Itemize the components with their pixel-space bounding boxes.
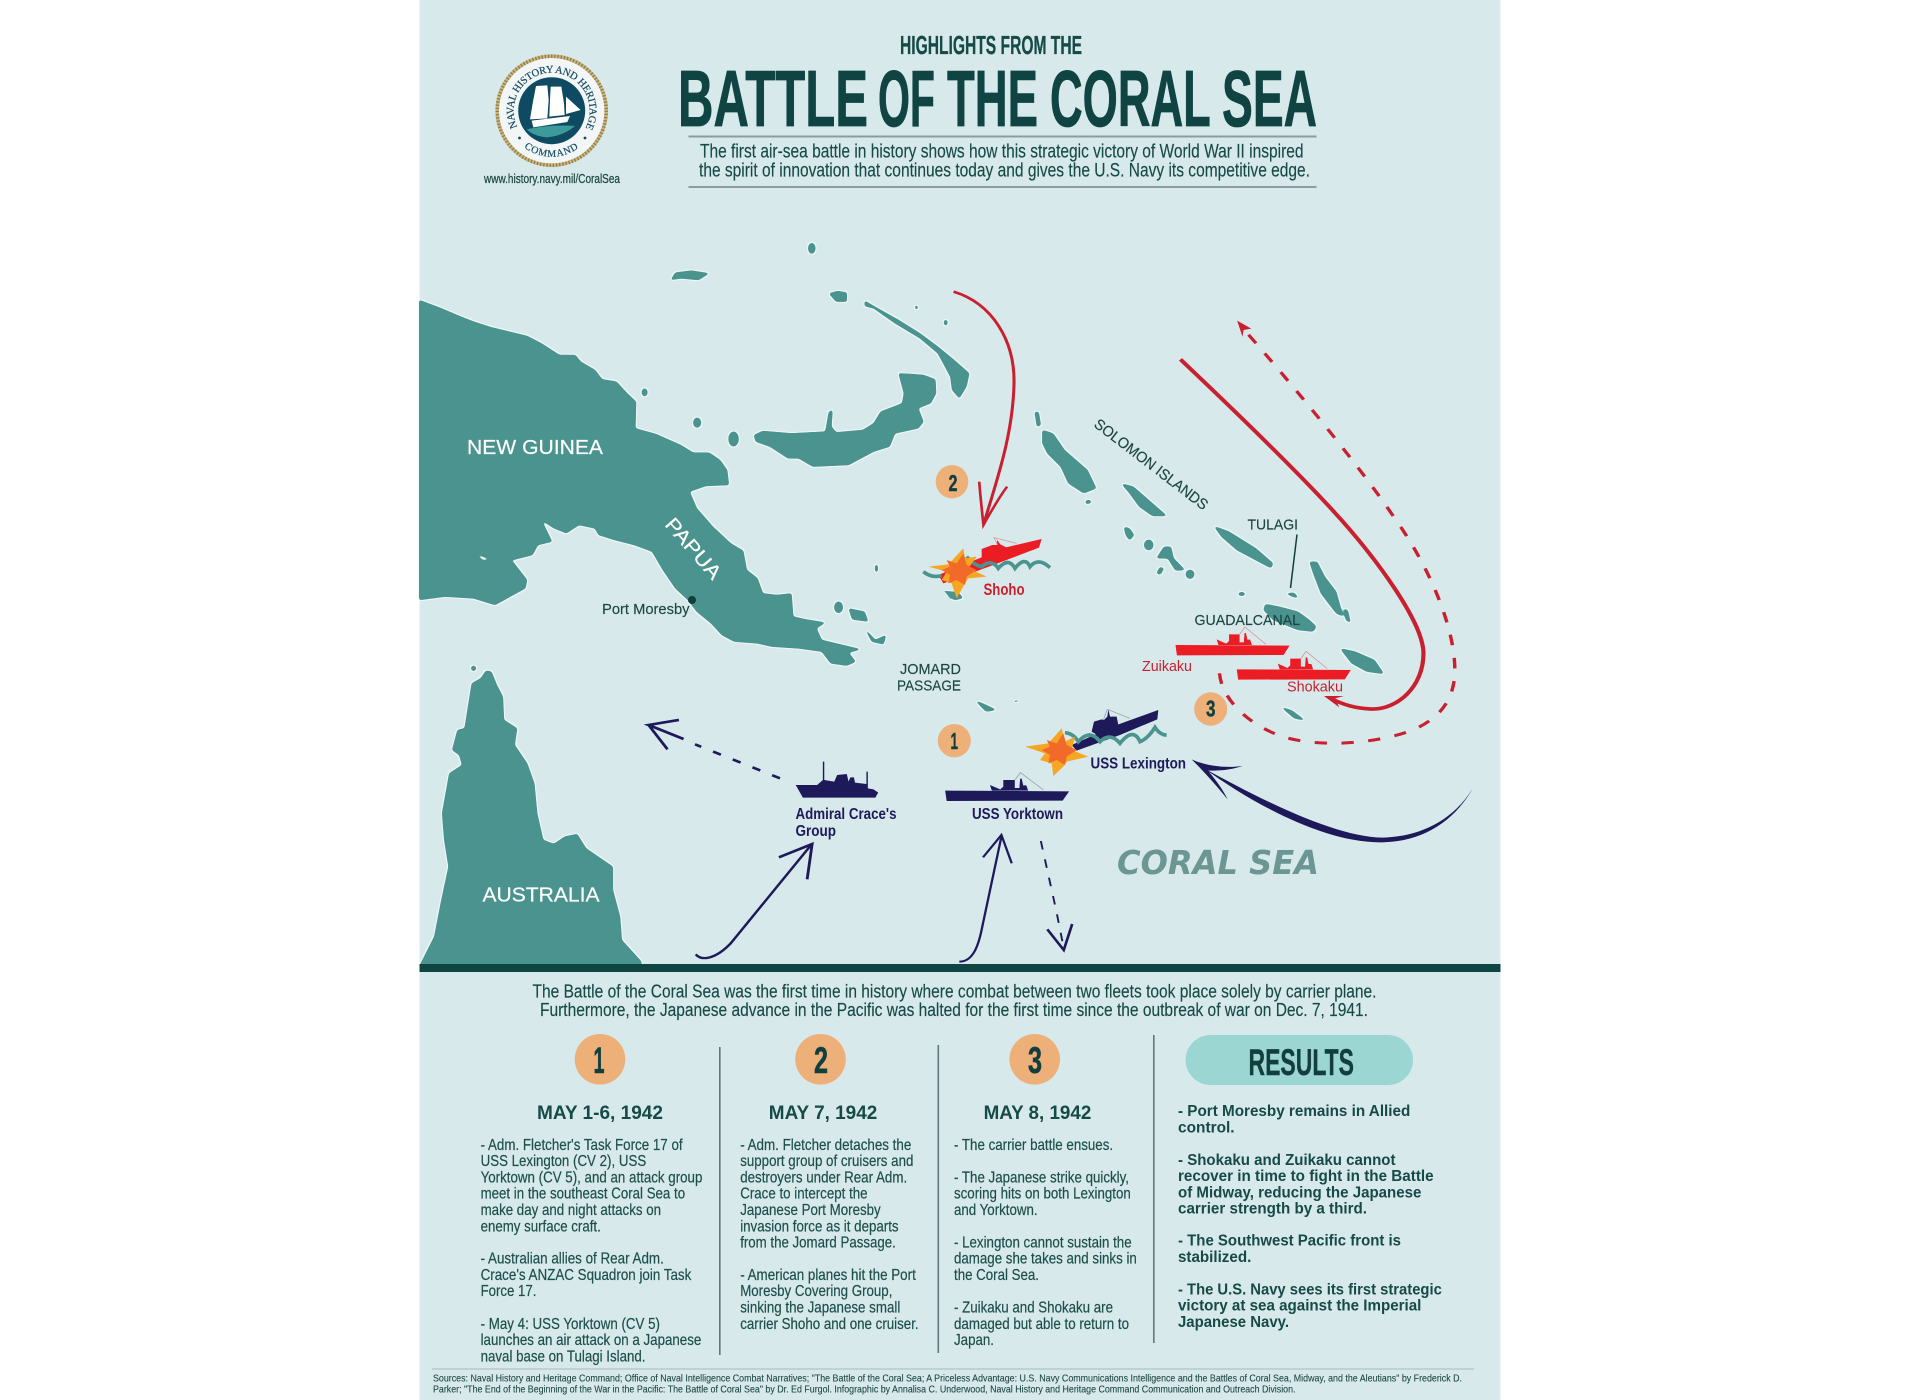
ship: USS Lexington hit by explosion [1025,709,1167,776]
text: May 1-6 events: Yorktown (CV 5), and an attack group [481,1169,702,1186]
text: May 7 events: Japanese Port Moresby [740,1202,881,1219]
ship label: Zuikaku: Zuikaku [1142,658,1192,675]
text: May 1-6 events: launches an air attack on a Japanese [481,1332,701,1349]
divider band [420,964,1500,972]
text: results list: - The U.S. Navy sees its first strategic [1178,1281,1442,1298]
text: May 1-6 events: USS Lexington (CV 2), USS [481,1153,646,1170]
heading: May 7: MAY 7, 1942 [769,1103,877,1124]
ship label: Admiral Crace's Group: Admiral Crace's [796,806,897,823]
subtitle: the spirit of innovation that continues today and gives the U.S. Navy its competitive edge. [699,160,1310,182]
badge 2 [795,1034,846,1085]
title: CORAL [1050,54,1210,143]
label: Tulagi with leader [1248,516,1298,588]
ship label: Admiral Crace's Group: Group [796,823,836,840]
text: May 8 events: damaged but able to return to [954,1316,1129,1333]
text: May 7 events: - American planes hit the Port [740,1267,916,1284]
text: May 7 events [740,1137,919,1333]
text block: battle summary [532,980,1376,1020]
label: New Guinea: NEW GUINEA [467,437,604,459]
text: May 1-6 events [481,1137,702,1365]
text: results list [1178,1103,1442,1331]
text: results list: Japanese Navy. [1178,1314,1289,1331]
text: May 7 events: carrier Shoho and one cruiser. [740,1316,919,1333]
badge 3 [1009,1034,1060,1085]
label: Tulagi with leader: TULAGI [1248,516,1298,534]
badge 1: 1 [594,1040,604,1081]
text: May 7 events: Moresby Covering Group, [740,1283,892,1300]
title: SEA [1222,54,1317,143]
text: May 8 events: - The Japanese strike quickly, [954,1169,1129,1186]
badge 3: 3 [1028,1040,1042,1081]
text: May 1-6 events: enemy surface craft. [481,1218,601,1235]
marker 2 [936,465,968,498]
results heading pill: RESULTS [1248,1042,1354,1083]
text: May 8 events: the Coral Sea. [954,1267,1039,1284]
text: May 7 events: destroyers under Rear Adm. [740,1169,907,1186]
arrow: Japanese approach to Shoho [954,292,1014,525]
ship label: Admiral Crace's Group [796,806,897,840]
subtitle: The first air-sea battle in history shows how this strategic victory of World War II inspired [700,142,1304,162]
text: May 8 events: and Yorktown. [954,1202,1038,1219]
marker 1 [938,724,971,757]
text: results list: of Midway, reducing the Japanese [1178,1184,1421,1201]
text: May 8 events: - The carrier battle ensues. [954,1137,1113,1154]
logo: Naval History and Heritage Command seal: COMMAND [525,143,578,157]
heading: May 8: MAY 8, 1942 [984,1103,1091,1124]
marker 2: 2 [948,470,958,496]
text: May 8 events [954,1137,1137,1349]
logo: Naval History and Heritage Command seal [495,54,608,167]
label: Jomard Passage: JOMARD [900,661,961,678]
ship: Shoho hit by explosion [923,538,1050,600]
ship label: USS Yorktown: USS Yorktown [972,806,1063,823]
ship label: USS Lexington: USS Lexington [1090,756,1186,772]
label: Australia: AUSTRALIA [482,884,600,906]
label: Solomon Islands: SOLOMON ISLANDS [1091,416,1211,514]
label: Coral Sea: CORAL SEA [1117,843,1319,882]
badge 1 [575,1034,625,1085]
text: May 8 events: Japan. [954,1332,994,1349]
text: results list: carrier strength by a third. [1178,1200,1367,1217]
subtitle [699,142,1310,182]
badge 2: 2 [814,1040,828,1081]
ship label: Shoho: Shoho [984,580,1024,599]
text: results list: - Shokaku and Zuikaku cannot [1178,1152,1396,1169]
marker 1: 1 [950,728,958,754]
panel: column 1 [481,1034,702,1365]
text: May 8 events: - Lexington cannot sustain the [954,1234,1132,1251]
label: Papua: PAPUA [660,514,726,585]
text: results list: - The Southwest Pacific front is [1178,1233,1401,1250]
label: Jomard Passage [897,661,961,694]
text: May 7 events: - Adm. Fletcher detaches the [740,1137,911,1154]
panel: results [1178,1035,1442,1331]
map: New Guinea and nearby islands [419,243,969,671]
text block: battle summary: The Battle of the Coral Sea was the first time in history where combat between two fleets took place solely by carrier plane. [532,980,1376,1002]
results heading pill [1186,1035,1413,1085]
text: May 8 events: damage she takes and sinks in [954,1251,1137,1268]
sources: Parker; "The End of the Beginning of the War in the Pacific: The Battle of Coral Sea" by Dr. Ed Furgol. Infographic by Annalisa C. Underwood, Naval History and Heritage Command Communication and Outreach Division. [433,1383,1296,1395]
text: May 8 events: - Zuikaku and Shokaku are [954,1300,1113,1317]
text: May 1-6 events: meet in the southeast Coral Sea to [481,1186,685,1203]
marker: Port Moresby: Port Moresby [602,601,690,618]
heading: May 1-6: MAY 1-6, 1942 [537,1103,663,1124]
arrow: Crace group approach [696,844,812,958]
ship: Shokaku [1237,651,1351,680]
ship: Admiral Crace's group [796,762,878,798]
text block: battle summary: Furthermore, the Japanese advance in the Pacific was halted for the first time since the outbreak of war on Dec. 7, 1941. [540,999,1368,1020]
text: May 7 events: Crace to intercept the [740,1186,868,1203]
ship: USS Yorktown [945,773,1069,801]
panel: background [420,0,1500,1400]
panel: column 3 [954,1034,1137,1349]
text: May 7 events: invasion force as it departs [740,1218,899,1235]
ship: Zuikaku [1176,627,1290,655]
logo url: www.history.navy.mil/CoralSea [483,171,621,186]
arrow: Yorktown dashed track [1041,841,1072,950]
text: May 1-6 events: naval base on Tulagi Island. [481,1348,646,1365]
arrow: Yorktown approach [959,835,1012,962]
text: May 1-6 events: - Adm. Fletcher's Task Force 17 of [481,1137,683,1154]
marker 3 [1194,692,1227,726]
text: May 1-6 events: Crace's ANZAC Squadron join Task [481,1267,692,1284]
text: May 7 events: support group of cruisers and [740,1153,913,1170]
text: May 8 events: scoring hits on both Lexington [954,1186,1131,1203]
marker 3: 3 [1206,696,1216,722]
text: results list: victory at sea against the Imperial [1178,1298,1421,1315]
text: results list: - Port Moresby remains in Allied [1178,1103,1410,1120]
arrow: Japanese carrier striking force solid track [1180,359,1423,709]
arrow: Lexington approach [1192,759,1473,842]
label: Jomard Passage: PASSAGE [897,678,961,694]
arrow: Crace dashed track [649,720,780,778]
text: May 7 events: from the Jomard Passage. [740,1234,896,1251]
text: May 1-6 events: make day and night attacks on [481,1202,661,1219]
title: BATTLE [678,54,868,143]
map: Solomon Islands [944,412,1384,721]
ship label: Shokaku: Shokaku [1287,678,1343,696]
text: May 1-6 events: Force 17. [481,1283,536,1300]
title: OF [878,54,935,143]
panel: column 2 [740,1034,919,1333]
text: results list: control. [1178,1119,1235,1136]
label: Guadalcanal: GUADALCANAL [1194,612,1300,629]
sources [433,1373,1462,1395]
arrow: Japanese carrier return dashed track [1220,321,1455,743]
title: THE [947,54,1038,143]
logo: Naval History and Heritage Command seal: NAVAL HISTORY AND HERITAGE [506,66,597,130]
text: May 1-6 events: - May 4: USS Yorktown (CV 5) [481,1316,660,1333]
text: results list: stabilized. [1178,1249,1251,1266]
text: results list: recover in time to fight in the Battle [1178,1168,1434,1185]
text: May 1-6 events: - Australian allies of Rear Adm. [481,1251,664,1268]
text: May 7 events: sinking the Japanese small [740,1299,900,1316]
map: Australia [419,671,641,968]
kicker heading: HIGHLIGHTS FROM THE [900,30,1082,60]
sources: Sources: Naval History and Heritage Command; Office of Naval Intelligence Combat Narratives; "The Battle of the Coral Sea; A Priceless Advantage: U.S. Navy Communications Intelligence and the Battles of Coral Sea, Midway, and the Aleutians" by Frederick D. [433,1373,1462,1385]
